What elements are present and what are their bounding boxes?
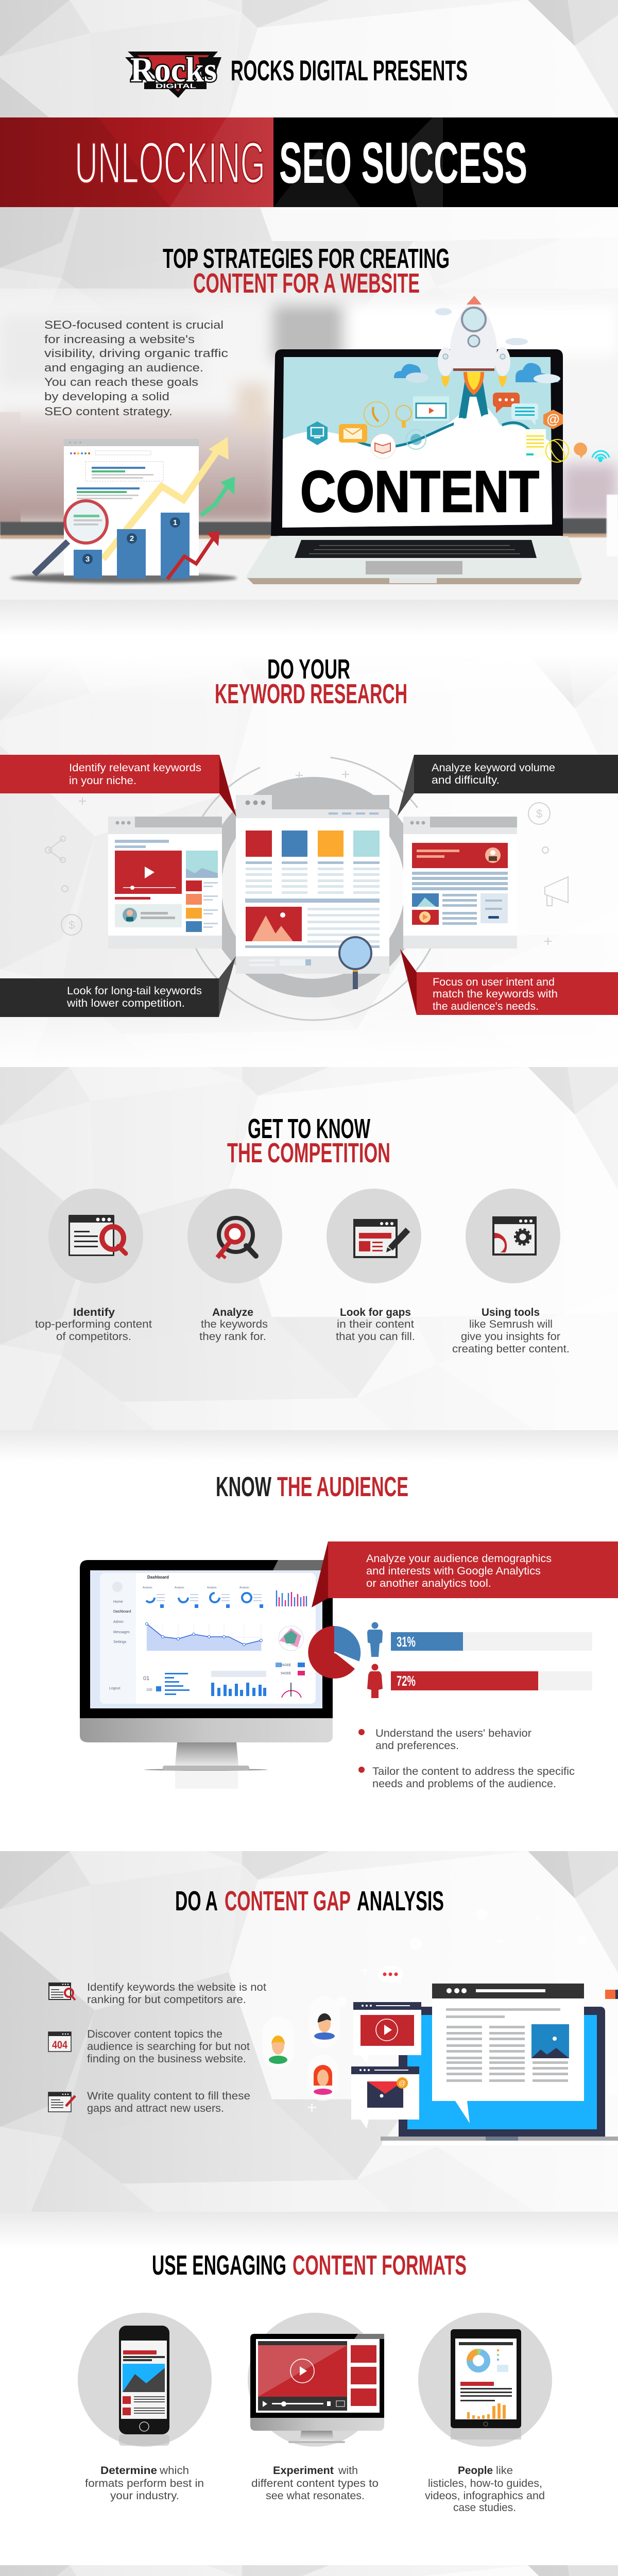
text block: tools: give you insights for [461,1330,560,1343]
text block: determine: Determine [100,2464,157,2477]
callout: long-tail keywords: Look for long-tail keywords [67,985,202,997]
chart: 31% bar: 31% [397,1634,416,1650]
text block: tools: like Semrush will [469,1318,553,1330]
text block: identify keywords: ranking for but competitors are. [87,1993,246,2006]
heading: know the audience: THE AUDIENCE [277,1471,408,1502]
chart: ranking illustration with magnifier [10,437,237,583]
heading: competition: GET TO KNOW [248,1113,370,1144]
mail window [351,2066,419,2129]
text block: experiment: see what resonates. [266,2489,365,2502]
icon: window with pencil [48,2092,75,2112]
heading: know the audience [216,1471,408,1502]
mail window: @ [399,2079,406,2087]
chart: 72% bar: 72% [397,1673,416,1689]
panel: keyword research background [0,654,618,1067]
center browser window [236,795,389,974]
text block: intro paragraph: for increasing a website's [44,333,195,346]
illustration: desktop monitor dashboard: Home [113,1600,123,1604]
callout: user intent: the audience's needs. [433,1000,539,1012]
illustration: desktop monitor dashboard: Dashboard [147,1575,169,1580]
panel: user-generated background [0,2565,618,2576]
illustration: desktop monitor dashboard [80,1560,333,1789]
right browser window [403,817,517,948]
heading: top strategies: TOP STRATEGIES FOR CREATING [163,243,450,274]
heading: keyword research [215,654,407,709]
heading: competition: THE COMPETITION [227,1138,390,1168]
illustration: desktop monitor dashboard: Logout [109,1687,120,1690]
logo: Rocks Digital: Rocks [130,50,217,89]
icon: rocket [438,296,510,395]
illustration: tablet format [418,2313,552,2447]
text block: experiment [251,2464,379,2502]
icons: marketing floating icons [307,308,609,463]
heading: content gap: DO A [175,1886,218,1917]
heading: content formats [152,2250,467,2281]
text block: identify keywords [87,1981,266,2006]
callout: analyze keyword volume: and difficulty. [432,774,500,786]
text block: experiment: Experiment [273,2464,334,2477]
illustration: desktop monitor dashboard: Messages [113,1631,130,1634]
video window [353,2002,421,2063]
icon: 404 window: 404 [52,2039,67,2051]
text block: identify [35,1306,152,1343]
illustration: keyword research windows: $ [536,807,542,820]
text block: people like: videos, infographics and [425,2489,545,2502]
text block: discover topics: Discover content topics the [87,2028,222,2040]
text block: intro paragraph [44,318,228,418]
text block: people like: like [496,2464,513,2477]
text block: determine: your industry. [110,2489,179,2502]
panel: content gap background [0,1851,618,2248]
chart: pie [308,1626,360,1679]
text block: gaps [336,1306,415,1343]
chart: ranking illustration with magnifier: 3 [85,555,90,564]
illustration: desktop monitor dashboard: Analysis [207,1586,217,1589]
text block: determine: which [159,2464,189,2477]
chat bubble [378,1965,403,1986]
text block: analyze [199,1306,268,1343]
text block: identify keywords: Identify keywords the website is not [87,1981,266,1993]
callout: identify relevant keywords: Identify relevant keywords [69,761,201,774]
illustration: desktop monitor dashboard: 01 [143,1675,149,1682]
text block: identify: top-performing content [35,1318,152,1330]
icon: using tools [466,1189,560,1283]
chart: 31% bar [367,1622,592,1657]
callout: demographics: Analyze your audience demographics [366,1552,552,1565]
left browser window [108,817,222,948]
illustration: keyword research windows [45,756,568,1020]
text block: analyze: the keywords [201,1318,268,1330]
callout: identify relevant keywords: in your niche. [69,774,136,787]
illustration: laptop with content screen [246,349,582,584]
heading: top strategies: CONTENT FOR A WEBSITE [193,268,420,299]
text block: audience bullets: and preferences. [375,1739,459,1752]
callout: analyze keyword volume [397,755,618,817]
panel: competition background [0,1067,618,1461]
text block: experiment: different content types to [251,2477,379,2489]
text block: identify: Identify [73,1306,115,1318]
heading: know the audience: KNOW [216,1471,271,1502]
text block: intro paragraph: visibility, driving organic traffic [44,347,228,360]
title banner: UNLOCKING [75,130,265,195]
text block: write quality content [87,2090,250,2114]
illustration: desktop monitor dashboard: 9408$ [281,1672,291,1675]
heading: content formats: USE ENGAGING [152,2250,286,2281]
callout: user intent [400,949,618,1015]
illustration: desktop monitor dashboard: Settings [113,1640,127,1644]
heading: content gap: ANALYSIS [357,1886,444,1917]
text block: identify: of competitors. [56,1330,131,1343]
illustration: keyword research windows: $ [68,919,75,931]
callout: demographics [312,1541,618,1607]
icon: identify competitors [48,1189,143,1283]
icon: magnifying glass [339,937,371,989]
icons: marketing floating icons: @ [546,411,560,427]
chart: 72% bar [367,1664,592,1698]
text block: audience bullets: Understand the users' behavior [375,1727,531,1739]
text block: discover topics: audience is searching for but not [87,2040,250,2053]
text block: audience bullets [358,1727,575,1790]
illustration: desktop monitor dashboard: Analysis [143,1586,152,1589]
text block: determine: formats perform best in [85,2477,204,2489]
callout: long-tail keywords [0,956,236,1017]
text block: intro paragraph: by developing a solid [44,390,169,403]
callout: demographics: and interests with Google Analytics [366,1565,541,1577]
title: Rocks Digital presents: ROCKS DIGITAL PRESENTS [231,54,468,87]
callout: user intent: Focus on user intent and [433,976,555,988]
callout: analyze keyword volume: Analyze keyword volume [432,761,555,774]
text block: analyze: they rank for. [199,1330,266,1343]
text block: analyze: Analyze [212,1306,253,1318]
callout: long-tail keywords: with lower competition. [66,997,185,1009]
fade below photo [0,600,618,636]
chart: ranking illustration with magnifier: 1 [173,518,177,527]
illustration: phone format [78,2313,212,2447]
illustration: desktop monitor dashboard: Dashboard [113,1610,131,1614]
heading: content gap: CONTENT GAP [225,1886,351,1917]
illustration: desktop monitor dashboard: Analysis [175,1586,184,1589]
icon: small window magnifier [48,1982,75,2000]
heading: keyword research: DO YOUR [267,654,350,685]
text block: discover topics [87,2028,250,2065]
panel: header background [0,0,618,350]
text block: intro paragraph: SEO-focused content is crucial [44,318,224,331]
text block: write quality content: gaps and attract new users. [87,2102,224,2114]
illustration: desktop monitor dashboard: 9408$ [281,1664,291,1667]
illustration: desktop monitor dashboard: Analysis [239,1586,249,1589]
text block: audience bullets: needs and problems of the audience. [372,1777,556,1790]
callout: identify relevant keywords [0,755,236,817]
text block: discover topics: finding on the business website. [87,2053,246,2065]
text block: gaps: Look for gaps [340,1306,411,1318]
heading: content formats: CONTENT FORMATS [293,2250,467,2281]
illustration: laptop with content windows [263,1909,618,2145]
text block: experiment: with [338,2464,358,2477]
logo: Rocks Digital: DIGITAL [156,83,196,90]
text block: intro paragraph: and engaging an audience. [44,361,203,374]
text block: people like: People [458,2464,493,2477]
chart: ranking illustration with magnifier: 2 [130,534,134,543]
avatars [263,1996,340,2101]
icon: 404 window [48,2032,71,2052]
text block: intro paragraph: SEO content strategy. [44,405,173,418]
text block: intro paragraph: You can reach these goals [44,376,198,388]
title banner [0,117,618,207]
text block: people like: listicles, how-to guides, [428,2477,542,2489]
text block: determine [85,2464,204,2502]
icon: analyze keywords [187,1189,282,1283]
text block: write quality content: Write quality content to fill these [87,2090,250,2102]
text block: audience bullets: Tailor the content to address the specific [372,1765,575,1777]
heading: keyword research: KEYWORD RESEARCH [215,679,407,709]
callout: user intent: match the keywords with [433,988,558,1000]
illustration: monitor format [248,2313,384,2447]
callout: demographics: or another analytics tool. [366,1577,491,1589]
illustration: desktop monitor dashboard: 100 [146,1688,152,1692]
heading: top strategies [163,243,450,299]
text block: tools: creating better content. [452,1343,570,1355]
text block: gaps: that you can fill. [336,1330,415,1343]
text block: tools [452,1306,570,1355]
illustration: desktop monitor dashboard: Admin [113,1620,124,1624]
text block: gaps: in their content [337,1318,414,1330]
illustration: laptop with content screen: CONTENT [300,459,539,524]
heading: competition [227,1113,390,1168]
text block: people like [425,2464,545,2514]
photo background: blurred desk scene [0,289,618,601]
text block: tools: Using tools [482,1306,540,1318]
text block: people like: case studies. [453,2501,516,2514]
icon: look for gaps [327,1189,421,1283]
